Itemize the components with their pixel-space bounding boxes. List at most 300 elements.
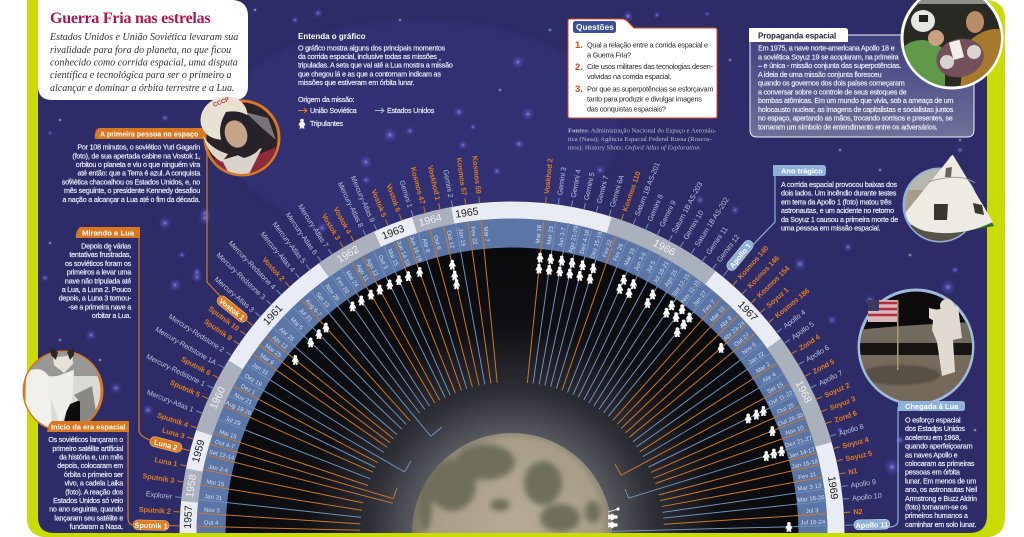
icon: crew <box>298 119 306 128</box>
text block: Entenda o gráfico: Origem da missão: <box>298 95 355 104</box>
mission: N1: N1 <box>848 466 858 477</box>
mission: Gemini 11 <box>594 224 731 413</box>
panel: Chegada à Lua <box>889 401 978 529</box>
mission: Vostok 5: Vostok 5 <box>369 188 389 218</box>
photo: Gagarin <box>200 96 280 176</box>
mission: Vostok 2: Aug 6-7 <box>304 298 323 319</box>
mission: Soyuz 5: Jan 15-18 <box>791 459 819 471</box>
mission: Soyuz 2: Out 25 <box>777 403 796 416</box>
mission: Zond 4: Zond 4 <box>797 332 822 353</box>
text block: Entenda o gráfico: tripuladas. A seta que vai até a Lua mostra a missão <box>298 61 453 70</box>
mission: Sputnik 10 <box>207 303 394 447</box>
mission: Soyuz 2: Soyuz 2 <box>823 380 851 400</box>
mission: Sputnik 4: Mai 15 <box>218 429 238 441</box>
mission: Luna 1: Luna 1 <box>154 455 178 468</box>
text: a Lua, a Luna 2. Pouco <box>62 285 131 294</box>
text: -se a primeira nave a <box>68 302 131 311</box>
astronaut <box>929 299 962 376</box>
mission: Vostok 6 <box>384 182 467 392</box>
mission: Kosmos 59 <box>470 155 503 383</box>
sources: Fontes: Administração Nacional do Espaço e Aeronáu- <box>568 128 716 134</box>
mission: Soyuz 4: Soyuz 4 <box>841 435 871 450</box>
mission: Gemini 1: Abr 8 <box>420 238 431 254</box>
panel: Início da era espacial <box>48 428 134 531</box>
mission: N2: Jul 3 <box>806 508 819 515</box>
mission: Soyuz 4: Jan 14-17 <box>788 447 816 460</box>
text: tornaram um símbolo de entendimento entre os adversários. <box>758 122 938 131</box>
question 1 <box>575 40 708 60</box>
text: lançaram seu satélite e <box>54 513 123 522</box>
mission: N2: N2 <box>853 507 863 516</box>
mission: Zond 5 <box>618 356 836 479</box>
tag <box>749 28 848 42</box>
mission: Sputnik 2: Nov 3 <box>204 508 221 515</box>
mission: Luna 3: Luna 3 <box>161 425 186 441</box>
panel: Propaganda espacial <box>749 28 974 137</box>
mission: Saturn 1B AS-203: Jul 5 <box>646 260 658 274</box>
text: Os soviéticos lançaram o <box>48 435 123 444</box>
text: acelerou em 1968, <box>905 433 961 442</box>
Apollo 11 landing crew near Moon <box>608 507 620 528</box>
year labels: 1964 <box>418 212 443 229</box>
missions before the gap (left side) <box>133 155 503 535</box>
mission: Mercury-Redstone 1A: Dez 19 <box>243 374 263 389</box>
mission: Gemini 10: Gemini 10 <box>681 209 705 241</box>
mission: Saturn 1B AS-202: Saturn 1B AS-202 <box>692 196 731 248</box>
text: órbita o primeiro ser <box>64 470 124 479</box>
mission: Saturn 1B AS-203 <box>579 180 704 402</box>
mission: Vostok 4: Vostok 4 <box>332 205 354 236</box>
mission: Luna 3: Out 4-7 <box>214 439 235 451</box>
mission: Mercury-Atlas 1 <box>146 386 373 483</box>
text: Em 1975, a nave norte-americana Apollo 18 e <box>758 44 895 52</box>
mission: Vostok 1: Vostok 1 <box>217 296 247 322</box>
legend: União Soviética <box>310 106 357 115</box>
mission: Voskhod 2: Voskhod 2 <box>542 158 555 194</box>
text block: Entenda o gráfico: O gráfico mostra alguns dos principais momentos <box>298 44 446 52</box>
mission: Voskhod 2: Mar 18 <box>536 224 543 244</box>
text: quando aperfeiçoaram <box>905 442 973 451</box>
photo: Apollo 1 capsule <box>900 155 994 245</box>
mission: Sputnik 2: Sputnik 2 <box>139 505 171 516</box>
mission: Gemini 5 <box>539 171 597 387</box>
question 1: a Guerra Fria? <box>587 50 631 60</box>
mission: Gemini 7: Dez 4-18 <box>579 229 592 255</box>
mission: Soyuz 5 <box>659 447 873 505</box>
title: Guerra Fria nas estrelas <box>50 10 210 27</box>
mission: Gemini 10: Jul 18-21 <box>653 260 671 285</box>
mission: Soyuz 3: Out 26-30 <box>777 412 805 428</box>
mission: Mercury-Atlas 7: Mercury-Atlas 7 <box>296 202 331 249</box>
text: primeiro satélite artificial <box>52 444 124 453</box>
mission: Gemini 11: Set 12-15 <box>672 272 692 298</box>
mission: Vostok 2 <box>259 254 415 425</box>
mission: Gemini 7 <box>545 174 611 388</box>
mission: Explorer <box>145 488 362 522</box>
mission: Mercury-Redstone 2 <box>167 311 387 456</box>
question 3 <box>575 84 713 114</box>
text: no espaço, apertando as mãos, trocando sorrisos e presentes, se <box>758 114 953 122</box>
mission: Apollo 6 <box>640 342 831 460</box>
tag: Chegada à Lua <box>905 402 959 411</box>
mission: Gemini 11: Gemini 11 <box>704 225 730 256</box>
text: orbitar a Lua. <box>92 311 131 320</box>
mission: Kosmos 146: Kosmos 146 <box>745 254 781 290</box>
mission: Sputnik 2 <box>139 503 361 528</box>
mission: Mercury-Atlas 6 <box>283 210 430 413</box>
mission: N2 <box>663 505 863 529</box>
panel: Ano trágico <box>748 165 898 250</box>
text: orbitou o planeta e viu o que ninguém vira <box>76 160 200 169</box>
text block: Entenda o gráfico: missões que estiveram em órbita lunar. <box>298 78 415 87</box>
mission: Mercury-Atlas 4: Mercury-Atlas 4 <box>258 230 297 274</box>
tag: A primeira pessoa no espaço <box>100 130 199 138</box>
text: ano, os astronautas Neil <box>905 485 978 494</box>
mission: Mercury-Atlas 7: Mai 24 <box>344 270 359 289</box>
mission: Mercury-Redstone 1: Mercury-Redstone 1 <box>145 352 207 388</box>
mission: Kosmos 110: Fev 22 <box>602 238 614 258</box>
mission: Vostok 6: Vostok 6 <box>384 182 403 213</box>
mission: Mercury-Atlas 8: Out 3 <box>376 254 388 271</box>
photo: man on the Moon <box>858 290 975 405</box>
tag <box>773 165 826 176</box>
mission: Mercury-Redstone 2: Mercury-Redstone 2 <box>167 312 226 354</box>
mission: Gemini 8 <box>568 192 666 397</box>
year labels: 1967 <box>735 299 760 324</box>
legend: Tripulantes <box>310 119 343 128</box>
text: pessoas em órbita <box>905 468 960 477</box>
mission: Sputnik 1: Sputnik 1 <box>134 521 168 531</box>
mission: Mercury-Atlas 9: Mercury-Atlas 9 <box>349 174 377 223</box>
mission: Apollo 10 <box>663 489 882 523</box>
mission: Sputnik 4 <box>156 409 370 490</box>
text <box>781 180 898 232</box>
mission: Zond 4: Mar 2 <box>755 361 772 375</box>
mission: Zond 6: Nov 10 <box>785 425 805 437</box>
mission: Apollo 10: Mar 18-26 <box>797 495 826 504</box>
mission: Soyuz 1: Abr 23-24 <box>723 320 747 343</box>
mission: N1: Fev 21 <box>798 472 818 481</box>
text <box>758 44 954 131</box>
mission: Gemini 9: Jun 3-6 <box>634 251 648 272</box>
mission: Soyuz 2 <box>649 379 851 477</box>
mission: Mercury-Atlas 7 <box>295 202 435 409</box>
text: lunar. Em menos de um <box>905 476 976 485</box>
mission: Kosmos 57 <box>455 157 497 384</box>
question 3: das conquistas espaciais? <box>587 104 666 114</box>
text: bombas atômicas. Em um mundo que vivia, sob a ameaça de um <box>758 96 953 105</box>
mission: Explorer: Explorer <box>145 489 173 501</box>
year labels: 1959 <box>190 438 208 464</box>
mission: Luna 1 <box>154 454 364 507</box>
question 2: volvidas na corrida espacial. <box>587 72 671 81</box>
text: quando os governos dos dois países começaram <box>758 78 905 88</box>
mission: Apollo 5 <box>633 318 816 451</box>
bend markers for lunar orbit missions <box>393 427 629 499</box>
text block: Entenda o gráfico: Entenda o gráfico <box>298 32 366 41</box>
mission: Sputnik 9: Sputnik 9 <box>202 317 234 343</box>
year labels <box>182 206 840 529</box>
mission: Apollo 4: Apollo 4 <box>781 308 807 330</box>
year labels: 1960 <box>208 385 228 411</box>
mission: Apollo 7: Out 11-22 <box>768 390 795 407</box>
mission: Apollo 7 <box>646 367 845 473</box>
mission: Sputnik 3 <box>142 470 363 515</box>
tag: Início da era espacial: Início da era espacial <box>51 422 125 432</box>
question 3: tanto para produzir e divulgar imagens <box>587 94 702 104</box>
intro text: Estados Unidos e União Soviética levaram sua <box>49 32 238 43</box>
mission: Sputnik 5: Aug 19-20 <box>224 400 253 417</box>
mission: Sputnik 5: Sputnik 5 <box>169 378 201 399</box>
text: nave não tripulada até <box>65 276 131 285</box>
flag <box>868 300 897 322</box>
mission: Luna 2: Set 12-14 <box>208 450 235 462</box>
mission: Apollo 8: Apollo 8 <box>838 422 865 438</box>
intro text: científica e tecnológica para ser o primeiro a <box>50 70 232 81</box>
mission: Gemini 2: Jan 19 <box>457 228 466 247</box>
connector to Luna 2 <box>139 232 153 441</box>
text <box>59 242 132 320</box>
text: no ano seguinte, quando <box>49 505 123 514</box>
mission: Apollo 5: Jan 22 <box>748 351 766 367</box>
mission: Gemini 12: Gemini 12 <box>715 233 741 264</box>
text: a soviética Soyuz 19 se acoplaram, na primeira <box>758 52 899 61</box>
mission: Soyuz 3 <box>651 393 857 484</box>
mission: Saturn 1B AS-201: Saturn 1B AS-201 <box>633 161 662 217</box>
year labels: 1958 <box>184 474 199 499</box>
mission: Mercury-Atlas 4 <box>258 229 435 439</box>
question 1: 1. <box>575 40 583 51</box>
mission: Apollo 11: Jul 16-24 <box>800 520 826 526</box>
text: A corrida espacial provocou baixas dos <box>781 180 898 189</box>
mission: Mercury-Atlas 3: Abr 25 <box>277 327 295 344</box>
mission: Sputnik 6 <box>180 353 381 467</box>
mission: Gemini 2: Gemini 2 <box>441 169 455 198</box>
mission: Gemini 3 <box>527 166 568 384</box>
mission: Gemini 9 <box>573 198 679 400</box>
mission: Sputnik 10: Mar 25 <box>263 343 283 360</box>
mission: Gemini 4: Jun 3-7 <box>558 226 568 248</box>
mission: Sputnik 3: Sputnik 3 <box>142 471 175 485</box>
mission: Soyuz 4 <box>657 433 871 499</box>
text block: Entenda o gráfico: da corrida espacial, inclusive todas as missões <box>298 52 437 61</box>
panel: A primeira pessoa no espaço <box>62 128 222 298</box>
intro text <box>49 32 238 94</box>
mission: Mercury-Atlas 1: Jul 29 <box>224 416 242 428</box>
text: fundaram a Nasa. <box>70 522 123 531</box>
mission: Gemini 3: Mar 23 <box>547 225 555 245</box>
mission: Zond 6 <box>653 407 858 488</box>
mission: Gemini 4: Gemini 4 <box>569 169 583 198</box>
text: Estados Unidos só veio <box>53 496 123 505</box>
connector to Apollo 1 <box>748 172 775 250</box>
year labels: 1961 <box>261 302 286 328</box>
text: caminhar em solo lunar. <box>905 520 976 529</box>
mission: Kosmos 154 <box>617 262 792 432</box>
mission: Saturn 1B AS-203: Saturn 1B AS-203 <box>670 180 704 235</box>
photo: Laika <box>20 347 106 432</box>
mission: Vostok 2: Vostok 2 <box>260 255 287 283</box>
mission: Mercury-Redstone 3 <box>214 249 406 434</box>
text block: Entenda o gráfico <box>298 32 453 104</box>
text: mês seguinte, o presidente Kennedy desafiou <box>64 186 200 195</box>
text: as naves Apollo e <box>905 450 958 459</box>
mission: Kosmos 154: Kosmos 154 <box>755 263 792 300</box>
mission: Vostok 4: Ago 12 <box>364 258 379 278</box>
mission: Apollo 6: Abr 4 <box>762 372 778 384</box>
mission: Soyuz 5: Soyuz 5 <box>845 449 873 463</box>
panel: Questões <box>568 19 717 118</box>
mission: Kosmos 140 <box>608 243 770 423</box>
mission: Mercury-Redstone 3: Mai 5 <box>289 317 304 332</box>
mission: Mercury-Atlas 4: Set 13 <box>314 292 330 310</box>
mission: Vostok 6: Jun 16-19 <box>408 236 422 263</box>
sources: tica (Nasa); Agência Espacial Federal Russa (Roscos- <box>568 136 712 143</box>
legend: Estados Unidos <box>387 106 435 115</box>
tag <box>95 128 207 139</box>
mission: Mercury-Atlas 9: Mai 15 <box>386 248 399 268</box>
missions after the gap (right side) <box>521 158 890 537</box>
text: depois, a Luna 3 tornou- <box>59 294 132 303</box>
text: uma pessoa em missão espacial. <box>781 224 881 232</box>
text: Armstrong e Buzz Aldrin <box>905 494 977 503</box>
mission: Kosmos 110 <box>556 170 642 392</box>
mission: Kosmos 186 <box>625 285 811 441</box>
mission: Kosmos 47 <box>409 166 478 388</box>
mission: Gemini 7: Gemini 7 <box>594 175 610 204</box>
mission: Mercury-Atlas 8 <box>335 180 451 400</box>
mission: Apollo 4 <box>629 306 807 445</box>
text <box>62 142 200 204</box>
mission: Gemini 8: Gemini 8 <box>645 193 665 223</box>
mission: Luna 3 <box>161 424 395 503</box>
text: soviética chacoalhou os Estados Unidos, e, no <box>62 178 200 186</box>
tag: Ano trágico <box>781 166 823 176</box>
mission: Mercury-Atlas 3 <box>213 274 401 438</box>
photo: Gagarin: CCCP <box>213 97 231 109</box>
tag: Propaganda espacial <box>758 32 836 40</box>
mission: Gemini 6A: Dez 15-16 <box>590 231 604 259</box>
text: (foto). A reação dos <box>65 487 124 496</box>
mission: Apollo 11: Apollo 11 <box>855 520 888 530</box>
text: dos Estadps Unidos <box>905 424 965 433</box>
mission: Apollo 8 <box>627 420 865 504</box>
text: vivo, a cadela Laika <box>64 479 123 488</box>
mission: Gemini 10 <box>584 208 706 406</box>
mission: Kosmos 57: Fev 22 <box>469 226 477 246</box>
tag: Mirando a Lua <box>82 228 135 238</box>
mission: Mercury-Atlas 6: Fev 20 <box>334 276 350 295</box>
mission: Mercury-Redstone 3: Mercury-Redstone 3 <box>215 251 267 301</box>
intro text: rivalidade para fora do planeta, no que ficou <box>50 45 231 56</box>
mission: Kosmos 186: Out 27 <box>733 332 752 348</box>
mission: Mercury-Atlas 6: Mercury-Atlas 6 <box>284 211 320 256</box>
tag <box>76 227 140 238</box>
mission: Kosmos 146: Mar 10 <box>710 305 727 323</box>
mission: Apollo 4: Nov 9 <box>742 342 758 356</box>
mission: Apollo 6: Apollo 6 <box>804 343 831 364</box>
question 2: Cite usos militares das tecnologias desen- <box>587 62 714 71</box>
mission: Gemini 1: Gemini 1 <box>398 179 415 209</box>
mission: Gemini 5: Ago 21-29 <box>568 225 580 254</box>
mission: Apollo 11 <box>609 518 890 537</box>
panel: Mirando a Lua <box>59 227 153 441</box>
text: O esforço espacial <box>905 416 961 424</box>
year labels: 1962 <box>335 243 361 266</box>
sources: mos); History Shots; Oxford Atlas of Exploration. <box>568 144 702 152</box>
legend <box>298 106 435 128</box>
mission: Sputnik 1 <box>133 519 360 535</box>
mission: Mercury-Redstone 4: Jul 21 <box>297 308 313 324</box>
question 3: 3. <box>575 84 583 95</box>
mission: Voskhod 1: Out 12 <box>445 230 455 250</box>
mission: Gemini 5: Gemini 5 <box>582 171 597 201</box>
mission: Vostok 3 <box>319 211 440 406</box>
arrow: União Soviética <box>298 108 307 113</box>
question 2: 2. <box>575 62 583 73</box>
mission: Apollo 7: Apollo 7 <box>817 368 844 388</box>
mission: Kosmos 59: Mar 7 <box>482 226 489 243</box>
mission: Kosmos 140: Fev 7 <box>702 299 717 315</box>
question 2 <box>575 62 714 81</box>
mission: Luna 2 <box>149 435 394 508</box>
text: (foto), de sua apertada cabine na Vostok 1, <box>72 151 200 160</box>
mission: Gemini 1 <box>398 179 473 390</box>
text: Por 108 minutos, o soviético Yuri Gagarin <box>77 142 200 152</box>
mission: Sputnik 10: Sputnik 10 <box>207 304 241 333</box>
mission: Mercury-Atlas 1: Mercury-Atlas 1 <box>146 388 195 414</box>
mission: Mercury-Redstone 1 <box>145 350 378 471</box>
mission: Sputnik 6: Sputnik 6 <box>180 354 212 377</box>
mission: Gemini 2 <box>441 168 491 385</box>
mission: Mercury-Atlas 5: Mercury-Atlas 5 <box>271 220 308 265</box>
mission: Explorer: Jan 31 <box>204 494 223 502</box>
mission: Vostok 5 <box>369 187 461 395</box>
mission: Gemini 12 <box>599 232 742 416</box>
text: Depois de várias <box>81 242 132 250</box>
mission: Gemini 9: Gemini 9 <box>657 199 678 228</box>
mission: Gemini 8: Mar 16 <box>624 247 637 267</box>
text: os soviéticos foram os <box>65 259 132 268</box>
mission: Luna 1: Jan 2-4 <box>208 465 229 475</box>
mission: Vostok 4 <box>331 205 445 403</box>
mission: Sputnik 4: Sputnik 4 <box>156 410 190 430</box>
mission: Sputnik 9: Mar 9 <box>259 353 275 367</box>
text: tentativas frustradas, <box>69 250 131 259</box>
mission: Apollo 1: Jan 27 <box>692 290 709 308</box>
mission: Apollo 9: Mar 3-13 <box>797 483 822 493</box>
text: (foto) tornaram-se os <box>905 502 968 512</box>
year labels: 1966 <box>651 237 677 259</box>
mission: Gemini 6A <box>551 173 626 390</box>
text: em terra da Apollo 1 (foto) matou três <box>781 197 892 206</box>
mission: Sputnik 1: Out 4 <box>204 520 219 527</box>
mission: Gemini 6A: Gemini 6A <box>608 174 626 208</box>
mission: Zond 5: Zond 5 <box>811 357 836 376</box>
year labels: 1957 <box>182 505 195 529</box>
mission: Vostok 5: Jun 14-19 <box>395 240 411 268</box>
mission: Apollo 8: Dez 21-27 <box>785 435 814 450</box>
text: da história e, um mês <box>59 452 124 462</box>
mission: Mercury-Atlas 8: Mercury-Atlas 8 <box>336 180 366 229</box>
mission: Mercury-Redstone 1A <box>154 323 408 476</box>
text: dois lados. Um incêndio durante testes <box>781 189 897 198</box>
text: até então: que a Terra é azul. A conquista <box>78 169 200 178</box>
text: – e única - missão conjunta das superpotências. <box>758 61 901 70</box>
text: primeiros humanos a <box>905 511 968 520</box>
arrow: Estados Unidos <box>375 108 384 113</box>
year labels: 1965 <box>455 206 479 221</box>
